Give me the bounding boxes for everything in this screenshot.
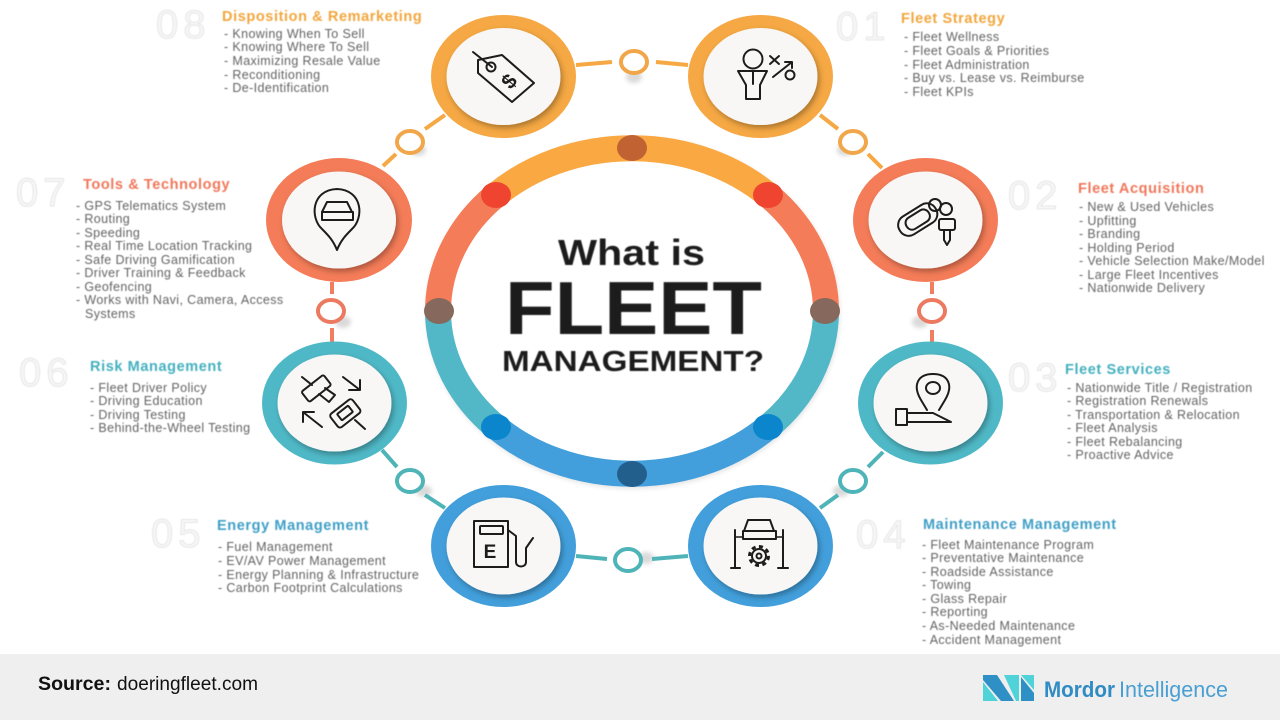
node 05: fuel pump icon — [431, 485, 576, 607]
section numbers — [16, 3, 1062, 557]
text: Tools & Technology: - GPS Telematics System — [76, 199, 226, 213]
text: Maintenance Management: - Accident Management — [922, 633, 1061, 647]
text: Fleet Services: - Nationwide Title / Registration — [1067, 381, 1253, 395]
section numbers: 04 — [856, 513, 910, 557]
section numbers: 07 — [16, 171, 70, 215]
text: Fleet Strategy — [901, 11, 1085, 99]
text: Maintenance Management: - Towing — [922, 578, 971, 592]
text: Fleet Acquisition: - Large Fleet Incentives — [1079, 268, 1219, 282]
node 03: fleet services icon — [858, 342, 1003, 464]
node 02: car keys icon — [853, 158, 998, 282]
text: Maintenance Management — [922, 517, 1117, 647]
text: Fleet Acquisition: - New & Used Vehicles — [1079, 200, 1214, 214]
node 08: price tag icon: $ — [497, 70, 522, 94]
central ring — [424, 135, 840, 487]
text: Fleet Acquisition: - Vehicle Selection Make/Model — [1079, 254, 1265, 268]
text: Disposition & Remarketing: - Reconditioning — [224, 68, 320, 82]
node 07: location pin car icon — [266, 158, 412, 282]
text: Maintenance Management: - Roadside Assistance — [922, 565, 1054, 579]
central title: FLEET — [505, 266, 762, 350]
node 01: strategist icon — [688, 15, 833, 138]
Mordor Intelligence logo — [983, 675, 1228, 702]
text: Tools & Technology: - Speeding — [76, 226, 140, 240]
text: Fleet Strategy: - Buy vs. Lease vs. Reimburse — [904, 71, 1085, 85]
text: Risk Management: - Fleet Driver Policy — [90, 381, 207, 395]
node 05: fuel pump icon: E — [484, 542, 496, 563]
text: Energy Management: - EV/AV Power Management — [218, 554, 386, 568]
section numbers: 01 — [836, 5, 890, 49]
connectors and small rings — [318, 51, 945, 571]
text: Tools & Technology: - Routing — [76, 212, 130, 226]
text: Fleet Strategy: - Fleet Wellness — [904, 30, 999, 44]
text: Risk Management: Risk Management — [90, 359, 222, 375]
text: Energy Management: - Carbon Footprint Calculations — [218, 581, 403, 595]
text: Fleet Strategy: - Fleet Goals & Priorities — [904, 44, 1049, 58]
text: Tools & Technology: Systems — [85, 307, 136, 321]
Mordor Intelligence logo: Intelligence — [1119, 677, 1228, 702]
Mordor Intelligence logo: Mordor — [1044, 677, 1115, 702]
source note — [38, 674, 258, 695]
central title — [502, 232, 764, 378]
text: Risk Management: - Driving Testing — [90, 408, 186, 422]
text: Fleet Acquisition: - Branding — [1079, 227, 1140, 241]
text: Disposition & Remarketing: - Knowing Where To Sell — [224, 40, 369, 54]
text: Disposition & Remarketing: - Maximizing Resale Value — [224, 54, 381, 68]
text: Fleet Services: - Registration Renewals — [1067, 394, 1208, 408]
central title: What is — [558, 232, 705, 273]
text: Energy Management: - Fuel Management — [218, 540, 333, 554]
text: Tools & Technology — [76, 177, 284, 321]
text: Fleet Strategy: - Fleet KPIs — [904, 85, 974, 99]
text: Fleet Services — [1065, 362, 1253, 462]
text: Fleet Strategy: Fleet Strategy — [901, 11, 1005, 27]
text: Risk Management — [90, 359, 250, 435]
text: Disposition & Remarketing — [222, 9, 422, 95]
text: Maintenance Management: - Glass Repair — [922, 592, 1007, 606]
text: Fleet Acquisition: Fleet Acquisition — [1078, 181, 1204, 197]
text: Risk Management: - Driving Education — [90, 394, 203, 408]
node 06: risk management icon — [262, 342, 407, 464]
text: Fleet Acquisition: - Holding Period — [1079, 241, 1175, 255]
text: Fleet Services: - Transportation & Relocation — [1067, 408, 1240, 422]
text: Energy Management: - Energy Planning & Infrastructure — [218, 568, 419, 582]
text: Tools & Technology: - Safe Driving Gamification — [76, 253, 235, 267]
text: Disposition & Remarketing: Disposition & Remarketing — [222, 9, 422, 25]
text: Fleet Services: - Fleet Rebalancing — [1067, 435, 1183, 449]
text: Maintenance Management: - Reporting — [922, 605, 988, 619]
text: Fleet Acquisition: - Nationwide Delivery — [1079, 281, 1205, 295]
text: Fleet Acquisition — [1078, 181, 1265, 295]
text: Tools & Technology: Tools & Technology — [83, 177, 230, 193]
text: Maintenance Management: Maintenance Management — [923, 517, 1117, 533]
text: Energy Management: Energy Management — [217, 518, 369, 534]
section numbers: 06 — [19, 351, 74, 395]
source note: Source: — [38, 674, 111, 695]
text: Energy Management — [217, 518, 419, 595]
text: Maintenance Management: - As-Needed Maintenance — [922, 619, 1075, 633]
section numbers: 05 — [151, 512, 206, 556]
text: Disposition & Remarketing: - Knowing When To Sell — [224, 27, 365, 41]
node 08: price tag icon — [431, 15, 576, 138]
footer bar — [0, 654, 1280, 720]
text: Fleet Services: - Proactive Advice — [1067, 448, 1174, 462]
text: Fleet Acquisition: - Upfitting — [1079, 214, 1137, 228]
text: Maintenance Management: - Fleet Maintenance Program — [922, 538, 1094, 552]
text: Fleet Services: Fleet Services — [1065, 362, 1171, 378]
text: Maintenance Management: - Preventative Maintenance — [922, 551, 1084, 565]
section numbers: 08 — [156, 3, 210, 47]
text: Disposition & Remarketing: - De-Identification — [224, 81, 329, 95]
section numbers: 02 — [1008, 174, 1062, 218]
text: Tools & Technology: - Works with Navi, Camera, Access — [76, 293, 284, 307]
text: Fleet Strategy: - Fleet Administration — [904, 58, 1030, 72]
node 04: car lift icon — [688, 485, 833, 607]
central title: MANAGEMENT? — [502, 346, 764, 378]
text: Tools & Technology: - Real Time Location Tracking — [76, 239, 252, 253]
text: Tools & Technology: - Geofencing — [76, 280, 152, 294]
text: Fleet Services: - Fleet Analysis — [1067, 421, 1158, 435]
source note: doeringfleet.com — [117, 674, 258, 695]
section numbers: 03 — [1008, 356, 1062, 400]
text: Tools & Technology: - Driver Training & Feedback — [76, 266, 246, 280]
text: Risk Management: - Behind-the-Wheel Testing — [90, 421, 250, 435]
